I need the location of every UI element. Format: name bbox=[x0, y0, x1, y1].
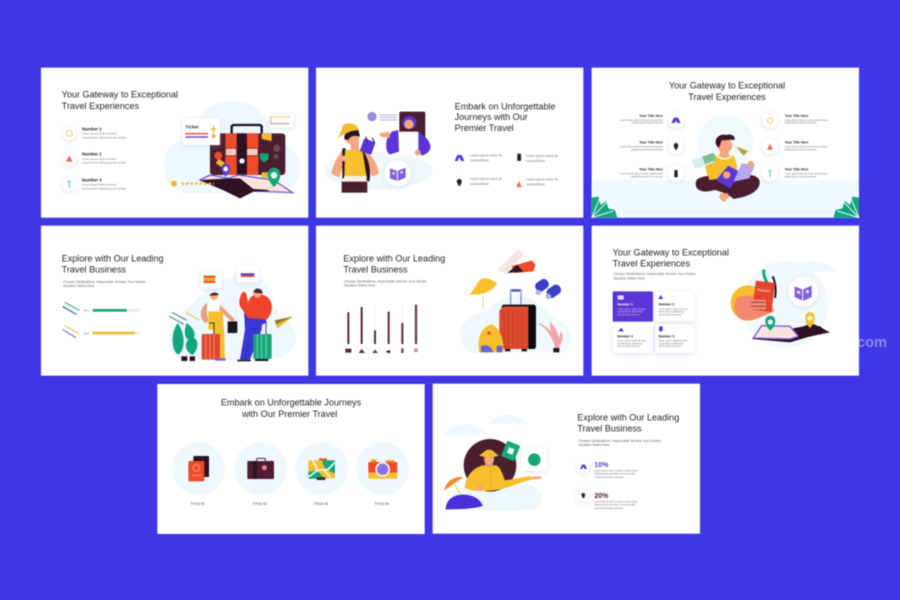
feature: sign bbox=[516, 178, 558, 187]
right item 3 bbox=[762, 165, 828, 181]
heading: Explore with Our Leading bbox=[343, 254, 445, 264]
statistic: 10%: adipiscing elit sed diam nonummy nibh bbox=[594, 473, 636, 476]
feature: tent: consectetuer bbox=[470, 158, 490, 162]
suitcase bbox=[499, 290, 536, 351]
card: number 3: Number 3 bbox=[659, 334, 674, 338]
card: number 1: Lorem ipsum dolor sit amet bbox=[617, 308, 646, 311]
heading bbox=[221, 398, 362, 419]
left item 2: Your Title Here bbox=[639, 141, 663, 145]
illustration: guide with umbrella bbox=[443, 415, 547, 511]
panel: business slide with progress bars bbox=[41, 226, 308, 376]
list item: number 2: Number 2 bbox=[82, 151, 102, 156]
progress: 80%: 80% bbox=[84, 309, 90, 313]
card: number 4 bbox=[613, 324, 653, 353]
feature: luggage bbox=[517, 154, 558, 163]
heading bbox=[577, 413, 679, 434]
heading bbox=[613, 248, 729, 269]
list item: number 2 bbox=[62, 151, 126, 166]
icon circle: briefcase bbox=[234, 442, 287, 506]
heading bbox=[669, 81, 785, 102]
icon circle: passports bbox=[172, 442, 225, 506]
list item: number 1: consectetuer adipiscing elit sed dia bbox=[82, 135, 126, 139]
subtitle bbox=[578, 439, 661, 447]
progress: 90% bbox=[63, 326, 140, 338]
palm leaves right bbox=[833, 197, 859, 218]
card: number 2: Lorem ipsum dolor sit amet bbox=[659, 308, 688, 311]
card: number 1: consectetuer adipiscing bbox=[617, 311, 643, 314]
right item 3: Lorem ipsum dolor sit amet consectetuer bbox=[785, 172, 828, 175]
panel: business slide with bar chart bbox=[316, 226, 583, 376]
hat bbox=[469, 278, 497, 309]
left item 2: adipiscing elit sed do eiusmod bbox=[631, 148, 664, 151]
card: number 2 bbox=[655, 291, 695, 322]
right item 1: adipiscing elit sed do eiusmod bbox=[785, 122, 817, 125]
heading: Your Gateway to Exceptional bbox=[669, 81, 785, 91]
card: number 3 bbox=[655, 324, 695, 353]
left item 1 bbox=[620, 112, 684, 128]
icon circle: camera: TITLE 04 bbox=[374, 502, 389, 506]
card: number 1: elit sed dia nonummy bbox=[617, 313, 641, 316]
flag bubble: russia bbox=[237, 266, 258, 282]
heading bbox=[343, 254, 445, 275]
right item 2 bbox=[762, 139, 828, 155]
left item 1: adipiscing elit sed do eiusmod bbox=[631, 122, 664, 125]
subtitle bbox=[344, 280, 427, 288]
panel: gateway slide with suitcase bbox=[41, 68, 308, 218]
watermark: .com bbox=[853, 335, 887, 351]
heading: with Our Premier Travel bbox=[241, 409, 337, 419]
statistic: 20%: euismod tincidunt ut laoreet bbox=[594, 507, 624, 510]
heading: Premier Travel bbox=[455, 123, 514, 133]
subtitle: Vacation Starts Here bbox=[344, 284, 375, 288]
bar chart bbox=[345, 305, 417, 353]
list item: number 1: Number 1 bbox=[82, 126, 102, 131]
illustration: seated reader bbox=[692, 135, 760, 202]
feature: sign: Lorem ipsum dolor sit bbox=[526, 178, 558, 182]
subtitle: Choose Destinations, Impeccable Service Your Dream bbox=[613, 272, 696, 276]
plant bbox=[539, 323, 562, 352]
card: number 2: Number 2 bbox=[659, 303, 674, 307]
card: number 3: elit sed dia nonummy bbox=[659, 345, 682, 348]
right item 2: adipiscing elit sed do eiusmod bbox=[785, 148, 817, 151]
statistic: 10% bbox=[577, 460, 638, 479]
illustration: suitcase on map bbox=[164, 101, 300, 198]
list item: number 1: Lorem ipsum dolor sit amet, bbox=[82, 132, 117, 136]
statistic: 20% bbox=[577, 489, 638, 510]
statistic: 20%: Lorem ipsum dolor sit amet, consectetuer bbox=[594, 501, 638, 504]
statistic: 10%: 10% bbox=[594, 462, 609, 469]
progress: 80% bbox=[63, 302, 140, 314]
card: number 3: consectetuer adipiscing bbox=[659, 342, 684, 345]
statistic: 10%: Lorem ipsum dolor sit amet, consectetuer bbox=[594, 470, 638, 473]
heading: Travel Experiences bbox=[613, 259, 690, 269]
feature: luggage: Lorem ipsum dolor sit bbox=[526, 154, 558, 158]
chart icons bbox=[345, 348, 417, 353]
feature: sign: consectetuer bbox=[526, 183, 546, 187]
right item 1 bbox=[762, 112, 828, 128]
icon circle: passports: TITLE 01 bbox=[190, 502, 205, 506]
subtitle: Choose Destinations, Impeccable Service Your Dream bbox=[578, 439, 661, 443]
card: number 1 bbox=[613, 291, 653, 322]
feature: location pin: Lorem ipsum dolor sit bbox=[470, 177, 502, 181]
ticket bbox=[498, 249, 536, 275]
card: number 4: consectetuer adipiscing bbox=[617, 342, 643, 345]
subtitle: Vacation Starts Here bbox=[578, 443, 610, 447]
subtitle bbox=[63, 280, 146, 288]
icon circle: briefcase: TITLE 02 bbox=[252, 502, 267, 506]
heading: Travel Business bbox=[62, 265, 126, 275]
left item 1: Lorem ipsum dolor sit amet consectetuer bbox=[620, 119, 663, 122]
right item 1: Your Title Here bbox=[785, 114, 808, 118]
card: number 4: elit sed dia nonummy bbox=[617, 345, 641, 348]
subtitle: Choose Destinations, Impeccable Service Your Dream bbox=[63, 280, 146, 284]
heading: Embark on Unforgettable Journeys bbox=[221, 398, 362, 408]
heading: Explore with Our Leading bbox=[577, 413, 679, 423]
illustration: passport and map: Passport bbox=[757, 288, 770, 293]
heading: Your Gateway to Exceptional bbox=[62, 90, 178, 100]
right item 3: adipiscing elit sed do eiusmod bbox=[785, 176, 817, 179]
feature: location pin bbox=[457, 177, 502, 186]
card: number 2: elit sed dia nonummy bbox=[659, 313, 682, 316]
feature: luggage: consectetuer bbox=[526, 159, 546, 163]
heading: Journeys with Our bbox=[455, 112, 528, 122]
flag bubble: spain bbox=[200, 271, 222, 289]
heading: Travel Experiences bbox=[688, 92, 766, 102]
progress: 90%: 90% bbox=[84, 331, 90, 335]
icon circle: camera bbox=[356, 442, 409, 506]
feature: tent: Lorem ipsum dolor sit bbox=[470, 153, 502, 157]
card: number 1: Number 1 bbox=[617, 303, 633, 307]
card: number 3: Lorem ipsum dolor sit amet bbox=[659, 340, 688, 343]
right item 1: Lorem ipsum dolor sit amet consectetuer bbox=[785, 119, 828, 122]
plants bbox=[173, 323, 197, 361]
heading bbox=[455, 101, 556, 133]
subtitle: Vacation Starts Here bbox=[613, 276, 645, 280]
heading: Travel Business bbox=[343, 265, 408, 275]
feature: tent bbox=[455, 153, 502, 162]
statistic: 20%: adipiscing elit sed diam nonummy nibh bbox=[594, 504, 636, 507]
left item 3: Your Title Here bbox=[639, 167, 663, 171]
backpack bbox=[478, 324, 503, 352]
heading bbox=[62, 254, 164, 275]
statistic: 10%: euismod tincidunt ut laoreet bbox=[594, 476, 624, 479]
illustration: two travellers bbox=[169, 266, 296, 361]
panel: business slide with statistics bbox=[433, 384, 700, 534]
list item: number 3: Lorem ipsum dolor sit amet, bbox=[82, 183, 117, 187]
panel: gateway slide with reader bbox=[592, 68, 859, 218]
heading: Your Gateway to Exceptional bbox=[613, 248, 729, 258]
list item: number 2: Lorem ipsum dolor sit amet, bbox=[82, 157, 117, 161]
illustration: traveller and guide bbox=[324, 112, 432, 193]
list item: number 3: consectetuer adipiscing elit sed dia bbox=[82, 186, 126, 190]
card: number 2: consectetuer adipiscing bbox=[659, 311, 684, 314]
right item 2: Your Title Here bbox=[785, 141, 808, 145]
statistic: 20%: 20% bbox=[594, 493, 609, 500]
panel: gateway slide with cards bbox=[592, 226, 859, 376]
panel: journeys slide with traveller bbox=[316, 68, 583, 218]
left item 2 bbox=[620, 138, 684, 154]
list item: number 3: Number 3 bbox=[82, 177, 102, 182]
subtitle: Choose Destinations, Impeccable Service Your Dream bbox=[344, 280, 427, 284]
left item 3: Lorem ipsum dolor sit amet consectetuer bbox=[620, 172, 663, 175]
icon circle: map bbox=[295, 442, 348, 506]
heading bbox=[62, 90, 178, 111]
guide profile card bbox=[367, 112, 397, 121]
right item 3: Your Title Here bbox=[785, 167, 808, 171]
left item 3: adipiscing elit sed do eiusmod bbox=[631, 176, 664, 179]
card: number 4: Lorem ipsum dolor sit amet bbox=[617, 340, 646, 343]
tickets bbox=[169, 312, 199, 324]
subtitle bbox=[613, 272, 696, 280]
list item: number 1 bbox=[62, 126, 126, 140]
left item 2: Lorem ipsum dolor sit amet consectetuer bbox=[620, 146, 663, 149]
illustration: suitcase on map: Ticket bbox=[185, 124, 199, 129]
left item 1: Your Title Here bbox=[639, 114, 663, 118]
illustration: passport and map bbox=[731, 261, 837, 348]
heading: Embark on Unforgettable bbox=[455, 101, 556, 111]
feature: location pin: consectetuer bbox=[470, 182, 490, 186]
palm leaves left bbox=[592, 197, 617, 218]
subtitle: Vacation Starts Here bbox=[63, 284, 94, 288]
right item 2: Lorem ipsum dolor sit amet consectetuer bbox=[785, 146, 828, 149]
binoculars bbox=[533, 277, 563, 300]
card: number 4: Number 4 bbox=[617, 334, 633, 338]
heading: Travel Business bbox=[577, 424, 642, 434]
heading: Travel Experiences bbox=[62, 101, 139, 111]
list item: number 2: consectetuer adipiscing elit sed dia bbox=[82, 161, 126, 165]
heading: Explore with Our Leading bbox=[62, 254, 164, 264]
illustration: luggage and gear bbox=[460, 249, 570, 352]
icon circle: map: TITLE 03 bbox=[313, 502, 328, 506]
list item: number 3 bbox=[62, 177, 126, 191]
panel: four icons slide bbox=[157, 384, 425, 534]
left item 3 bbox=[620, 165, 684, 181]
